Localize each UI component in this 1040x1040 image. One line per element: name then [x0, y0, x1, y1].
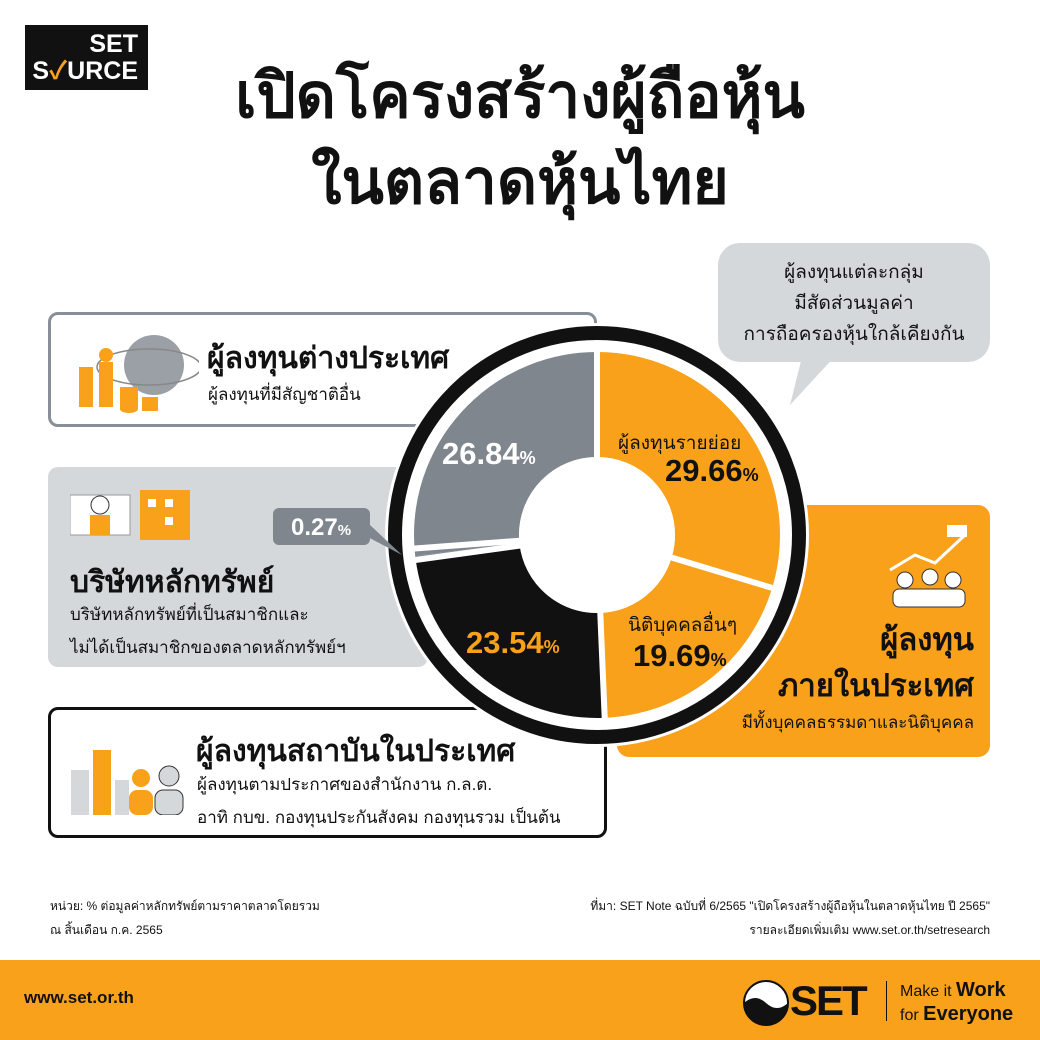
logo: SET SOURCE: S✓URCE [32, 57, 138, 85]
panel: foreign investors [48, 312, 597, 427]
footnote left: หน่วย: % ต่อมูลค่าหลักทรัพย์ตามราคาตลาดโดยรวม [50, 899, 320, 913]
panel: foreign investors: ผู้ลงทุนต่างประเทศ [207, 342, 449, 375]
label: foreign 26.84: 26.84% [442, 436, 536, 471]
panel: domestic institutional: อาทิ กบข. กองทุนประกันสังคม กองทุนรวม เป็นต้น [197, 808, 561, 827]
panel: foreign investors: ผู้ลงทุนที่มีสัญชาติอื่น [208, 385, 361, 404]
speech bubble: ผู้ลงทุนแต่ละกลุ่ม [784, 262, 924, 283]
footer band [0, 960, 1040, 1040]
panel: domestic investors: มีทั้งบุคคลธรรมดาและนิติบุคคล [742, 713, 974, 732]
logo: SET [743, 977, 1013, 1026]
icon: chart and people [889, 525, 967, 608]
panel: securities companies: ไม่ได้เป็นสมาชิกของตลาดหลักทรัพย์ฯ [70, 638, 346, 657]
text: 29.66% [665, 453, 759, 488]
panel: domestic investors: ภายในประเทศ [778, 668, 974, 703]
footnote right [590, 898, 990, 937]
logo: SET SOURCE [25, 25, 148, 90]
title: ในตลาดหุ้นไทย [311, 148, 729, 217]
panel: domestic investors: ผู้ลงทุน [880, 622, 974, 657]
icon: city and people [71, 750, 184, 815]
footnote left [50, 899, 320, 937]
panel: domestic institutional [48, 707, 607, 838]
footer band: www.set.or.th [24, 988, 134, 1007]
panel: domestic investors [617, 505, 990, 757]
icon: office [70, 490, 190, 540]
title [235, 60, 805, 220]
footnote right: ที่มา: SET Note ฉบับที่ 6/2565 "เปิดโครงสร้างผู้ถือหุ้นในตลาดหุ้นไทย ปี 2565" [590, 899, 990, 913]
panel: domestic institutional: ผู้ลงทุนสถาบันในประเทศ [196, 735, 515, 768]
text: 19.69% [633, 638, 727, 673]
icon: globe and coins [79, 335, 199, 413]
footnote right: รายละเอียดเพิ่มเติม www.set.or.th/setresearch [749, 923, 990, 937]
panel: domestic institutional: ผู้ลงทุนตามประกาศของสำนักงาน ก.ล.ต. [197, 775, 492, 794]
speech bubble [718, 243, 990, 405]
logo: SET: SET [790, 977, 866, 1024]
callout: 0.27%: 0.27% [291, 514, 351, 541]
speech bubble: การถือครองหุ้นใกล้เคียงกัน [744, 324, 964, 345]
logo: SET: Make it Work [900, 979, 1006, 1001]
panel: securities companies [48, 467, 428, 667]
title: เปิดโครงสร้างผู้ถือหุ้น [235, 62, 805, 131]
panel: securities companies: บริษัทหลักทรัพย์ [70, 566, 274, 599]
logo: SET SOURCE: SET [89, 30, 138, 58]
logo: SET: for Everyone [900, 1003, 1013, 1025]
label: institutional 23.54: 23.54% [466, 625, 560, 660]
label: other juristic 19.69: นิติบุคคลอื่นๆ [628, 615, 737, 636]
footnote left: ณ สิ้นเดือน ก.ค. 2565 [50, 923, 163, 937]
callout: 0.27% [273, 508, 402, 555]
speech bubble: มีสัดส่วนมูลค่า [794, 293, 914, 314]
label: retail 29.66: ผู้ลงทุนรายย่อย [618, 433, 741, 454]
panel: securities companies: บริษัทหลักทรัพย์ที่เป็นสมาชิกและ [70, 605, 309, 624]
